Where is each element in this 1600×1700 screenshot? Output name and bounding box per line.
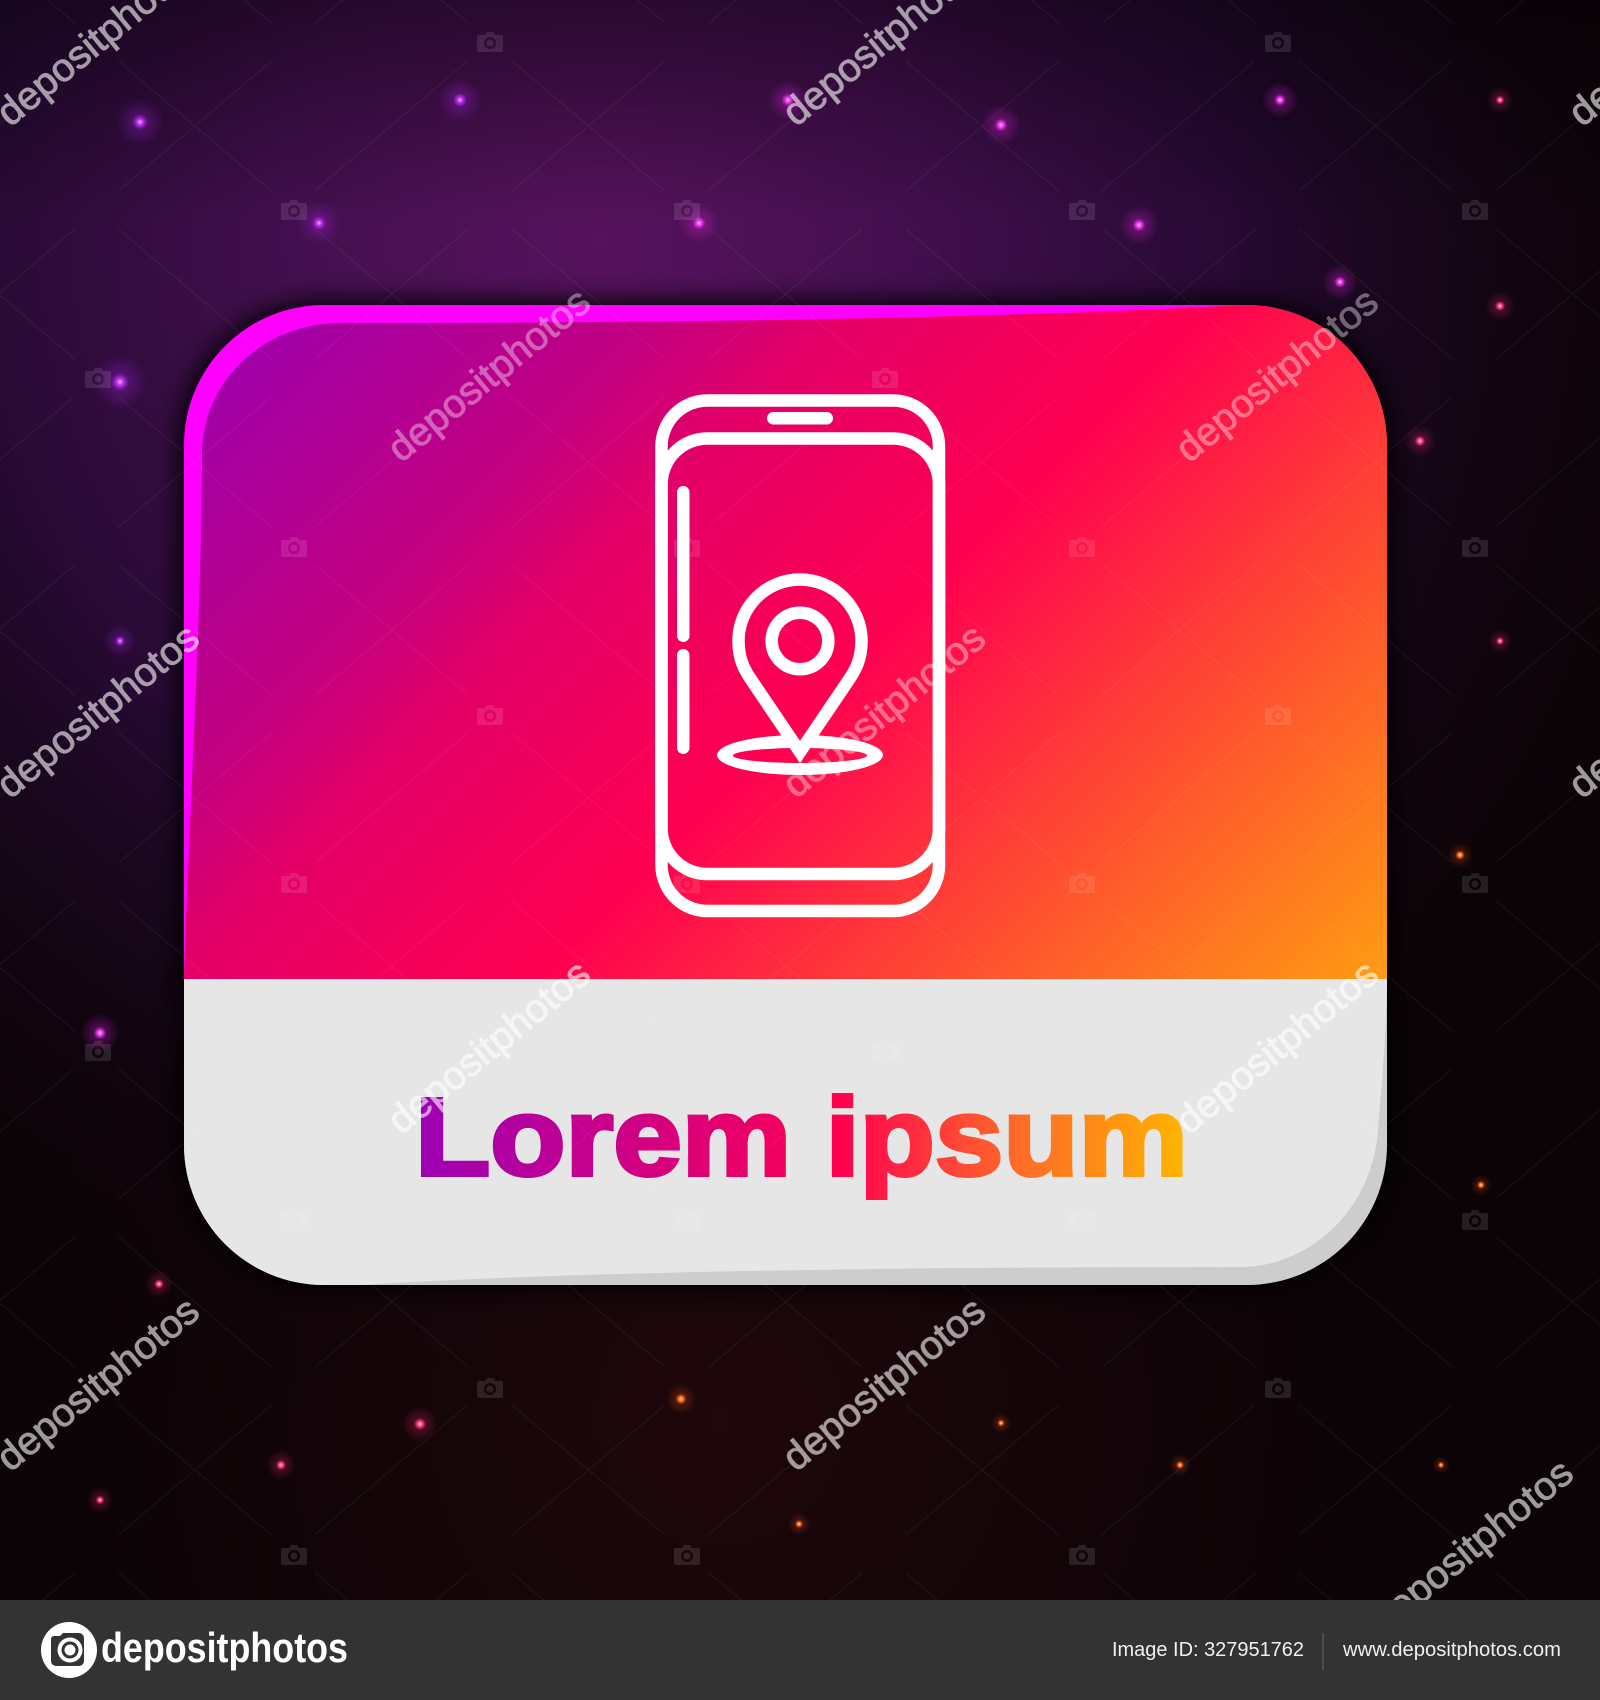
card bottom: light panel [184, 979, 1387, 1285]
phone screen [662, 438, 939, 874]
card top: magenta rim [184, 305, 1387, 979]
watermark camera marks [85, 32, 1488, 1565]
watermark texts: depositphotos [380, 952, 599, 1143]
icon: depositphotos camera logo [41, 1622, 97, 1678]
watermark texts: depositphotos [380, 280, 599, 471]
watermark texts: depositphotos [1168, 280, 1387, 471]
location pin [738, 580, 862, 752]
background star lights [80, 78, 1515, 1535]
watermark texts: depositphotos [1168, 952, 1387, 1143]
watermark texts: depositphotos [775, 1289, 994, 1480]
footer bar [0, 1600, 1600, 1700]
card top: gradient panel [184, 305, 1387, 979]
website url: www.depositphotos.com [1342, 1639, 1561, 1661]
screen glare bar long [677, 486, 690, 642]
watermark texts: depositphotos [775, 616, 994, 807]
card drop shadow [180, 301, 1391, 1289]
screen glare bar short [677, 649, 690, 754]
pin base ellipse [717, 735, 883, 775]
phone body [662, 400, 939, 911]
icon: smartphone with location pin [662, 400, 939, 911]
pin inner ring [772, 613, 828, 669]
card title: Lorem ipsum: Lorem ipsum [415, 1076, 1188, 1199]
logo wordmark: depositphotos [101, 1624, 348, 1671]
phone speaker [767, 412, 833, 424]
card bottom: grey rim [184, 979, 1387, 1285]
card [184, 305, 1387, 1285]
watermark texts: depositphotos [1363, 1451, 1582, 1642]
image id: Image ID: 327951762 [1112, 1639, 1304, 1661]
